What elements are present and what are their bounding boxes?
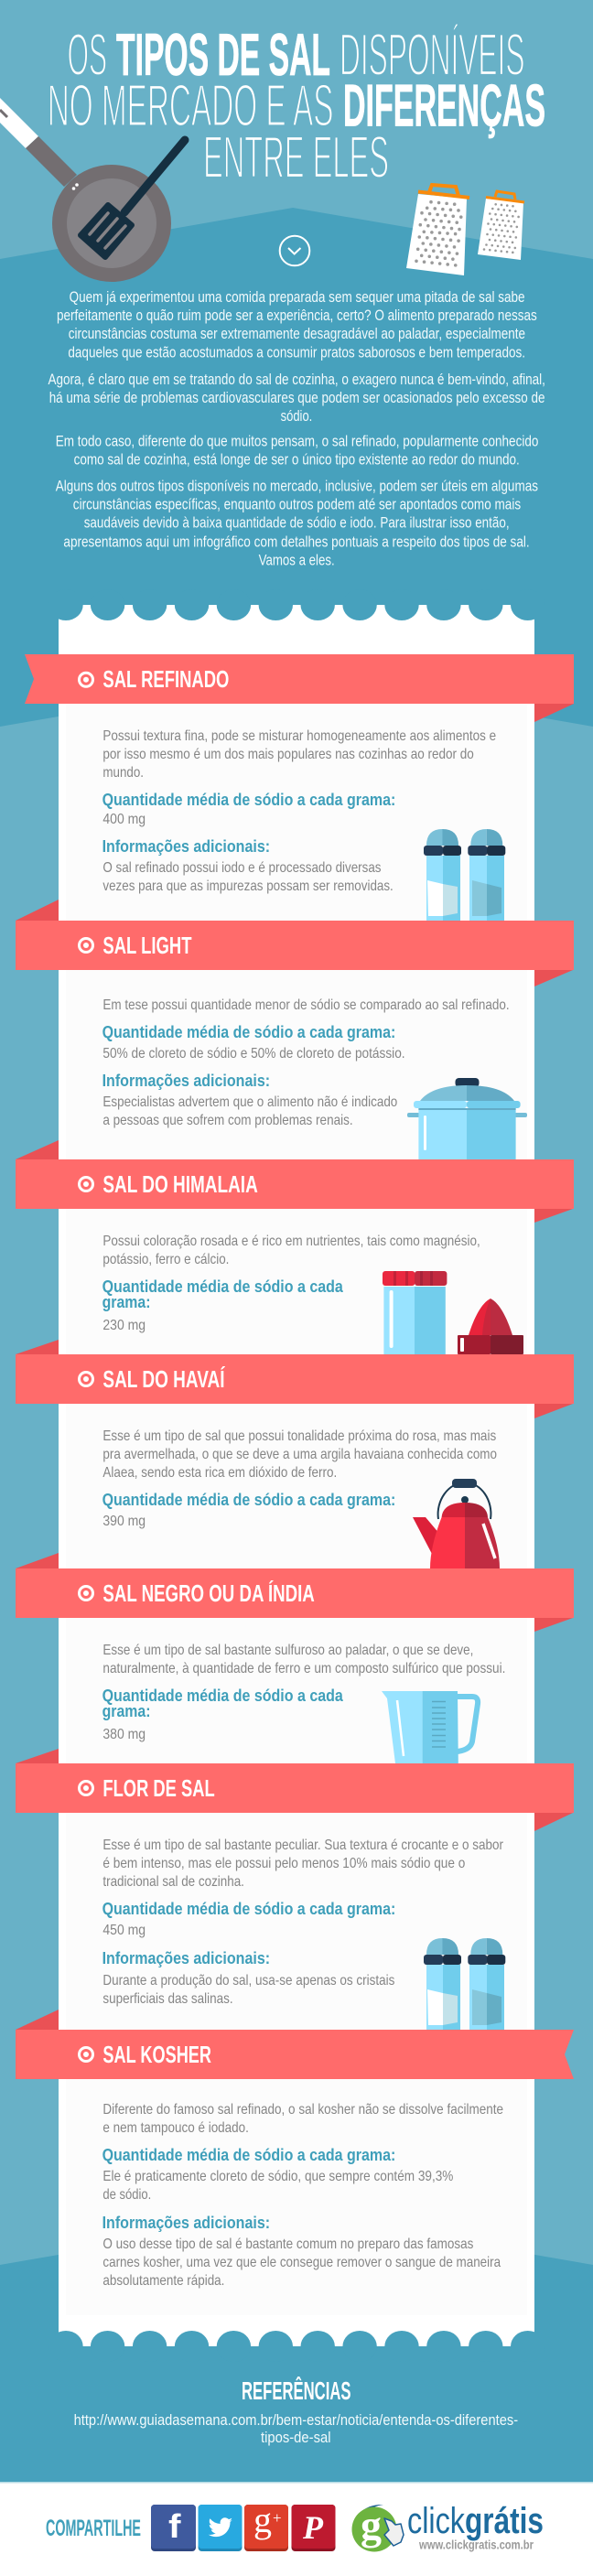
icon: chevron down circle — [280, 236, 309, 265]
section text: 50% de cloreto de sódio e 50% de cloreto de potássio. — [102, 1046, 405, 1062]
panel: sal kosher: absolutamente rápida. — [102, 2273, 224, 2289]
icon: facebook button: f — [168, 2507, 182, 2545]
section text: grama: — [102, 1292, 150, 1311]
section text: Durante a produção do sal, usa-se apenas os cristais — [102, 1973, 394, 1989]
icon: measuring cup — [382, 1691, 478, 1763]
section text: Em tese possui quantidade menor de sódio se comparado ao sal refinado. — [102, 997, 510, 1013]
references — [74, 2377, 518, 2446]
ribbon heading: sal kosher — [16, 2030, 574, 2079]
section text: Esse é um tipo de sal que possui tonalidade próxima do rosa, mas mais — [102, 1428, 496, 1444]
ribbon folds — [16, 704, 574, 2030]
title: NO MERCADO E AS — [48, 72, 333, 139]
footer background — [0, 2482, 593, 2576]
title — [48, 21, 545, 190]
ribbon heading: sal do himalaia: SAL DO HIMALAIA — [102, 1170, 258, 1198]
intro text — [48, 289, 545, 569]
references: REFERÊNCIAS — [242, 2377, 351, 2405]
section text: Esse é um tipo de sal bastante sulfuroso ao paladar, o que se deve, — [102, 1643, 473, 1658]
references: tipos-de-sal — [261, 2430, 331, 2446]
panel: sal kosher: Ele é praticamente cloreto de sódio, que sempre contém 39,3% — [102, 2169, 453, 2184]
section text: é bem intenso, mas ele possui pelo menos 10% mais sódio que o — [102, 1856, 465, 1871]
section text: Possui textura fina, pode se misturar homogeneamente aos alimentos e — [102, 728, 496, 744]
section text: Informações adicionais: — [102, 1071, 270, 1090]
panel: sal kosher: e nem tampouco é iodado. — [102, 2120, 249, 2136]
section text — [102, 1838, 504, 2007]
section text — [102, 1643, 505, 1742]
section text: Informações adicionais: — [102, 836, 270, 856]
ribbon heading: sal do himalaia — [16, 1159, 574, 1209]
section text: Esse é um tipo de sal bastante peculiar. Sua textura é crocante e o sabor — [102, 1838, 504, 1853]
intro text: Vamos a eles. — [259, 553, 335, 569]
ribbon heading: sal kosher: SAL KOSHER — [102, 2041, 211, 2068]
section text: Alaea, sendo esta rica em dióxido de ferro. — [102, 1465, 337, 1481]
title: TIPOS DE SAL — [116, 21, 330, 88]
title: OS — [68, 21, 107, 88]
icon: facebook button — [151, 2505, 196, 2551]
title: ENTRE ELES — [203, 124, 389, 190]
section text: Quantidade média de sódio a cada grama: — [102, 1022, 395, 1041]
icon: frying pan with spatula — [0, 98, 185, 282]
ribbon heading: sal light: SAL LIGHT — [102, 932, 192, 959]
section text: Quantidade média de sódio a cada — [102, 1277, 343, 1296]
icon: juicer — [458, 1299, 523, 1354]
logo: clickgrátis: grátis — [465, 2501, 544, 2541]
section text: vezes para que as impurezas possam ser removidas. — [102, 878, 394, 894]
icon: graters — [406, 185, 524, 275]
ribbon heading: flor de sal — [16, 1763, 574, 1813]
panel: sal do himalaia — [102, 1234, 523, 1354]
ribbon heading: sal light — [16, 921, 574, 970]
icon: salt shakers — [424, 829, 505, 921]
section text: potássio, ferro e cálcio. — [102, 1252, 229, 1267]
panel: sal kosher: Quantidade média de sódio a cada grama: — [102, 2145, 395, 2164]
icon: red kettle — [413, 1479, 500, 1568]
section text: pra avermelhada, o que se deve a uma argila havaiana conhecida como — [102, 1447, 497, 1462]
panel: sal kosher: de sódio. — [102, 2187, 151, 2203]
panel: sal refinado — [102, 728, 505, 921]
section text: 450 mg — [102, 1923, 146, 1938]
intro text: sódio. — [281, 408, 312, 425]
panel: sal kosher: Diferente do famoso sal refinado, o sal kosher não se dissolve facilmente — [102, 2102, 503, 2118]
section text: Especialistas advertem que o alimento não é indicado — [102, 1094, 397, 1110]
icon: pinterest button — [291, 2505, 335, 2551]
ribbon heading: sal negro ou da índia — [16, 1568, 574, 1618]
share label: COMPARTILHE — [46, 2516, 141, 2541]
logo: clickgrátis: g — [361, 2502, 382, 2549]
icon: twitter button — [198, 2505, 242, 2551]
icon: google plus button — [244, 2499, 288, 2551]
section text: 390 mg — [102, 1514, 146, 1529]
section text: Quantidade média de sódio a cada — [102, 1686, 343, 1705]
icon: pinterest button: P — [302, 2509, 324, 2546]
section text: por isso mesmo é um dos mais populares nas cozinhas ao redor do — [102, 747, 474, 762]
icon: google plus button: g — [253, 2499, 272, 2540]
panel: flor de sal — [102, 1838, 505, 2030]
section text: naturalmente, à quantidade de ferro e um composto sulfúrico que possui. — [102, 1661, 505, 1676]
panel: sal kosher — [102, 2102, 503, 2289]
section text: Quantidade média de sódio a cada grama: — [102, 1899, 395, 1918]
logo: clickgrátis — [351, 2501, 544, 2551]
section text: O sal refinado possui iodo e é processado diversas — [102, 860, 382, 876]
section text: Quantidade média de sódio a cada grama: — [102, 1490, 395, 1509]
section text: Possui coloração rosada e é rico em nutrientes, tais como magnésio, — [102, 1234, 480, 1249]
section text: mundo. — [102, 765, 144, 781]
ribbon heading: flor de sal: FLOR DE SAL — [102, 1774, 215, 1802]
panel: sal kosher: Informações adicionais: — [102, 2213, 270, 2232]
section text: grama: — [102, 1701, 150, 1720]
icon: google plus button: + — [273, 2509, 282, 2527]
section text: tradicional sal de cozinha. — [102, 1874, 244, 1890]
section text: superficiais das salinas. — [102, 1991, 233, 2007]
ribbon heading: sal refinado: SAL REFINADO — [102, 665, 229, 693]
icon: pot — [407, 1078, 527, 1159]
ribbon heading: sal negro ou da índia: SAL NEGRO OU DA ÍNDIA — [102, 1579, 315, 1607]
ribbon heading: sal refinado — [25, 654, 574, 704]
ribbon heading: sal do havaí: SAL DO HAVAÍ — [102, 1365, 225, 1393]
section text: 230 mg — [102, 1318, 146, 1333]
section text — [102, 728, 496, 894]
ribbon heading: sal do havaí — [16, 1354, 574, 1404]
intro text: saudáveis devido à baixa quantidade de sódio e iodo. Para ilustrar isso então, — [84, 515, 510, 532]
icon: jar — [383, 1271, 447, 1354]
logo: clickgrátis: www.clickgratis.com.br — [418, 2537, 534, 2551]
logo: clickgrátis: click — [407, 2501, 466, 2541]
section text — [102, 1428, 497, 1529]
section text: Informações adicionais: — [102, 1948, 270, 1967]
panel: sal light — [102, 997, 527, 1159]
panel: sal do havaí — [102, 1428, 500, 1568]
section text — [102, 997, 510, 1128]
panel: sal kosher: carnes kosher, uma vez que ele consegue remover o sangue de maneira — [102, 2255, 501, 2270]
section text — [102, 1234, 480, 1333]
section text: 380 mg — [102, 1727, 146, 1742]
section text: 400 mg — [102, 812, 146, 827]
panel: sal kosher: O uso desse tipo de sal é bastante comum no preparo das famosas — [102, 2236, 473, 2252]
section text: a pessoas que sofrem com problemas renais. — [102, 1113, 353, 1128]
section text: Quantidade média de sódio a cada grama: — [102, 790, 395, 809]
panel: white paper with scalloped edges — [40, 589, 553, 2362]
icon: salt shakers — [424, 1938, 505, 2030]
panel: sal negro ou da índia — [102, 1643, 505, 1763]
references: http://www.guiadasemana.com.br/bem-estar/noticia/entenda-os-diferentes- — [74, 2412, 518, 2429]
